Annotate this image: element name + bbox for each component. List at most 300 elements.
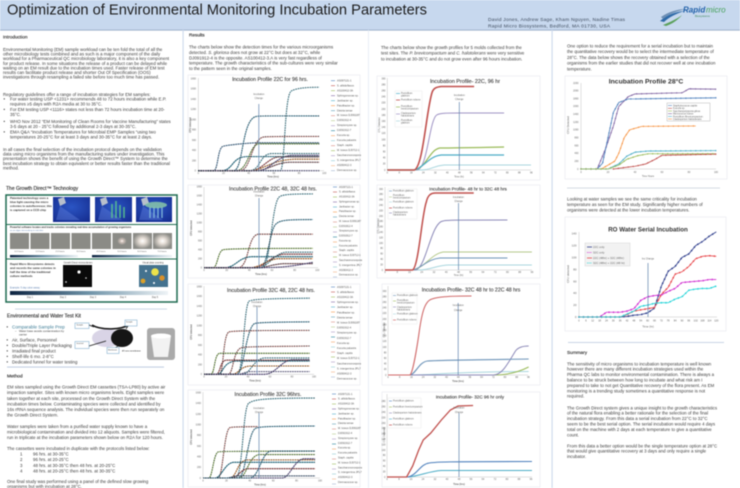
chart: incubation profile 22C 48, 32C 48: 1400 xyxy=(197,204,203,206)
chart: RO water serial incubation: 42 xyxy=(626,320,629,322)
text block: introduction body: EMA Q&A “Incubation Temperatures for Microbial EMP Samples “using two xyxy=(10,130,156,134)
chart: RO water serial incubation: 24 xyxy=(605,320,608,322)
legend xyxy=(388,398,423,428)
legend: AS100412-3A xyxy=(337,88,353,92)
text block: mold charts intro: The charts below show the growth profiles for 5 molds collected from the xyxy=(381,45,522,50)
chart: mold profile 32C 48 hr to 22C 48 hrs: 20 xyxy=(384,368,387,371)
legend: halotolerans xyxy=(397,309,411,312)
funnel cup image xyxy=(147,328,175,360)
legend xyxy=(333,186,363,277)
chart: mold profile 32C 96 hr only: 220 xyxy=(382,416,386,419)
chart: incubation profile 32C 48, 22C 48: 60 xyxy=(269,376,272,378)
chart: mold profile 22C 96 hr: 64 xyxy=(482,172,485,174)
chart: mold profile 32C 48 hr to 22C 48 hrs: 72 xyxy=(492,376,495,379)
text block: introduction body: presentation shows the benefit of using the Growth Direct™ System to determine the xyxy=(3,156,168,161)
chart: incubation profile 32C 96hrs: 600 xyxy=(197,445,202,448)
text block: method body: EM sites sampled using the Growth Direct EM cassettes (TSA-LP80) by active air xyxy=(7,385,166,390)
chart: incubation profile 22C 48, 32C 48: 0 xyxy=(203,269,205,272)
legend: S. intergerrima JPL7 xyxy=(337,158,361,162)
legend: Penicillium Brevicompactum xyxy=(673,115,703,118)
chart: mold profile 48 hr to 32C 48 hrs: 88 xyxy=(518,271,522,274)
chart: mold profile 22C 96 hr: 160 xyxy=(382,120,386,123)
day timeline: Day 3 xyxy=(90,296,97,299)
day timeline: Day 2 xyxy=(60,296,67,299)
incubation change label: Change xyxy=(253,305,262,308)
chart: incubation profile 22C 48, 32C 48: 80 xyxy=(293,269,297,272)
text block: introduction body: for product release. In some situations the release of a product can be delayed while xyxy=(3,61,168,66)
chart: mold profile 32C 48 hr to 22C 48 hrs: 40 xyxy=(445,376,448,379)
chart: incubation profile 32C 48, 22C 48: 100 xyxy=(312,376,317,378)
incubation change label: Incubation xyxy=(453,406,465,410)
heading: test kit: Environmental and Water Test Kit xyxy=(7,314,82,320)
chart: incubation profile 32C 48, 22C 48: 0 xyxy=(203,376,205,378)
chart: mold profile 32C 48 hr to 22C 48 hrs: 48 xyxy=(457,376,460,379)
chart: incubation profile 28C: Time Hours xyxy=(642,175,655,178)
chart: incubation profile 22C 96 hrs: 20 xyxy=(222,172,225,175)
chart: incubation profile 22C 96 hrs: 1200 xyxy=(191,108,197,111)
text block: mold charts intro: test sites. The P. brevicompactum and C. halotolerans were very sensitive xyxy=(381,51,524,56)
chart: mold profile 32C 96 hr only: CFU Detected xyxy=(383,427,386,443)
legend: brevicompactum xyxy=(397,302,415,305)
text block: results intro: detected. S. gloriosa does not grow at 22°C but does at 32°C, while xyxy=(189,50,320,55)
chart: mold profile 32C 48 hr to 22C 48 hrs: 80 xyxy=(384,351,387,354)
chart: mold profile 32C 96 hr only: 160 xyxy=(382,433,386,436)
chart: RO water serial incubation: 60 xyxy=(573,279,577,283)
black microcolony image xyxy=(63,262,93,287)
bullet list: carrier xyxy=(19,332,27,336)
legend: glabrum xyxy=(401,95,410,98)
text block: single temperature option: the quantitative recovery would be to select the intermediate temperature of xyxy=(567,49,714,54)
legend: 22C (48hr) + 32C (48hr) xyxy=(593,256,624,260)
text block: method body: incubation times below. Contaminating species were collected and identified by xyxy=(7,401,161,406)
panel: summary xyxy=(567,350,718,459)
chart: mold profile 22C 96 hr: 140 xyxy=(382,126,386,129)
chart: mold profile 48 hr to 32C 48 hrs: 96 xyxy=(531,271,534,274)
chart: mold profile 22C 96 hr: 200 xyxy=(382,108,386,111)
row 3 text: Rapid Micro Biosystems detects xyxy=(10,262,55,266)
row 2 time-lapse squares xyxy=(10,233,172,249)
chart: mold profile 32C 96 hr only: 8 xyxy=(398,478,400,481)
legend: Kocuria palustris xyxy=(337,346,357,350)
chart: RO water serial incubation: 0 xyxy=(578,320,580,322)
legend: DJ091912-7 xyxy=(339,235,353,238)
text block: introduction body: Environmental Monitoring (EM) sample workload can be ten fold the total of all the xyxy=(3,47,163,52)
chart: mold profile 32C 96 hr only: 56 xyxy=(470,478,473,481)
text block: introduction body: • xyxy=(4,119,6,124)
chart: incubation profile 28C: 600 xyxy=(574,144,579,147)
growth curves xyxy=(387,406,532,477)
chart: incubation profile 32C 96hrs: 80 xyxy=(295,480,299,482)
chart: incubation profile 22C 48, 32C 48: 0 xyxy=(201,266,203,270)
chart: mold profile 32C 48 hr to 22C 48 hrs: 80 xyxy=(504,376,507,379)
legend: Streptomyces sp. xyxy=(338,436,358,440)
legend: Penicillium glabrum xyxy=(393,400,414,402)
bullet list: Dedicated funnel for water testing xyxy=(12,360,78,364)
legend: S. albidoflavus xyxy=(337,83,355,87)
text block: mold charts intro: to incubation at 30-35°C and do not grow even after 96 hours incubation. xyxy=(381,56,522,61)
chart: mold profile 48 hr to 32C 48 hrs: 56 xyxy=(469,271,473,274)
chart: mold profile 48 hr to 32C 48 hrs: 120 xyxy=(379,236,384,239)
chart: RO water serial incubation: 66 xyxy=(653,320,656,322)
chart: mold profile 32C 96 hr only: 60 xyxy=(383,460,386,463)
incubation change label: Incubation xyxy=(453,304,464,307)
chart: incubation profile 28C: CFU Detected xyxy=(566,116,570,134)
text block: results intro: to the pattern seen in the original samples. xyxy=(189,66,272,71)
legend: AS100412-3A xyxy=(337,295,353,299)
text block: method body: One final study was performed using a panel of the defined slow growing xyxy=(7,479,149,484)
chart: RO water serial incubation: 120 xyxy=(572,244,577,248)
legend: Patulibacter sp. xyxy=(338,416,356,420)
row 2 time labels: 3.0 hours xyxy=(76,250,86,253)
chart: incubation profile 32C 48, 22C 48: 200 xyxy=(198,363,203,366)
legend xyxy=(585,243,630,266)
text block: water samples: Looking at water samples we see the same criticality for incubation xyxy=(567,196,697,201)
chart: RO water serial incubation: 30 xyxy=(612,320,615,322)
text block: single temperature option: One option to reduce the requirement for a serial incubation but to maintain xyxy=(567,43,714,48)
chart: mold profile 32C 48 hr to 22C 48 hrs: CFU Detected xyxy=(383,322,386,338)
row 1 text: blue light causing the micro xyxy=(10,200,49,204)
legend: Penicillium rubens xyxy=(393,424,413,426)
legend: S. albidoflavus xyxy=(338,397,356,401)
chart: incubation profile 22C 96 hrs: 80 xyxy=(298,172,301,175)
chart: mold profile 22C 96 hr: 180 xyxy=(382,114,386,117)
chart: mold profile 32C 96 hr only: 100 xyxy=(382,449,386,452)
day timeline: Day 4 xyxy=(120,296,127,299)
legend: 32C only xyxy=(593,250,605,254)
panel: introduction xyxy=(3,34,172,170)
legend: AS097121-1 xyxy=(337,78,352,82)
chart: mold profile 32C 96 hr only: 0 xyxy=(386,478,388,481)
chart: RO water serial incubation: 6 xyxy=(585,320,587,322)
legend: Cladosporium xyxy=(401,112,416,115)
chart: incubation profile 28C: 1800 xyxy=(573,97,579,100)
chart: RO water serial incubation: 72 xyxy=(660,320,663,322)
legend xyxy=(388,189,417,219)
text block: summary body: total on the machine with 2 days at each temperature to give a quantitative xyxy=(567,427,712,432)
chart: RO water serial incubation: 108 xyxy=(700,320,705,322)
text block: introduction body: • xyxy=(4,107,6,112)
text block: method body: 2 xyxy=(20,457,23,462)
chart: mold profile 32C 48 hr to 22C 48 hrs: 120 xyxy=(382,340,387,343)
legend: Sphingomonas sp. xyxy=(337,300,359,304)
legend: Penicillium xyxy=(393,194,404,197)
chart title: Incubation Profile 32C 96hrs. xyxy=(235,392,301,398)
legend: Patulibacter sp. xyxy=(339,210,357,213)
legend: Cladosporium halotolerans xyxy=(393,412,422,414)
chart: RO water serial incubation: 36 xyxy=(619,320,622,322)
text block: summary body: The Growth Direct system gives a unique insight to the growth characteristics xyxy=(567,405,718,410)
chart: incubation profile 22C 96 hrs: CFU detected xyxy=(189,117,192,133)
text block: summary body: seem to be the best serial option. The serial incubation would require 4 days xyxy=(567,422,716,426)
legend: Staphylococcus capitis xyxy=(673,104,698,107)
legend: Dermacoccus sp. xyxy=(339,274,359,277)
chart: mold profile 22C 96 hr: 40 xyxy=(383,157,386,160)
chart: incubation profile 32C 48, 22C 48: CFU detected xyxy=(190,324,193,340)
chart: incubation profile 28C: 20 xyxy=(607,171,610,174)
text block: summary body: balance to be struck between how long to incubate and what risk am I xyxy=(567,378,702,382)
legend: Janibacter sp. xyxy=(337,98,353,102)
row 2 time labels: 0.0 hours xyxy=(14,250,24,253)
chart: mold profile 48 hr to 32C 48 hrs: 300 xyxy=(379,188,384,191)
legend: AS090412-3 xyxy=(338,475,353,479)
chart: mold profile 22C 96 hr: 80 xyxy=(383,144,386,147)
legend: M. luteus DJ0712-1 xyxy=(339,254,361,257)
legend: DJ091912-4 xyxy=(337,118,352,122)
row 2 time labels: 6.0 hours xyxy=(137,250,147,253)
legend: Kocuria sp. xyxy=(673,107,685,110)
chart: mold profile 32C 48 hr to 22C 48 hrs: 180 xyxy=(382,323,387,326)
chart: mold profile 48 hr to 32C 48 hrs: 180 xyxy=(379,220,384,223)
chart: mold profile 32C 48 hr to 22C 48 hrs: 300 xyxy=(382,290,387,293)
chart: RO water serial incubation: 102 xyxy=(694,320,698,322)
chart: RO water serial incubation: 54 xyxy=(639,320,643,322)
technology diagram frame: as an algae microcolony in real-time xyxy=(10,229,44,232)
incubation change label: Change xyxy=(454,200,463,203)
chart: mold profile 32C 96 hr only: 260 xyxy=(382,406,386,409)
title: Optimization of Environmental Monitoring Incubation Parameters xyxy=(7,3,427,19)
chart: mold profile 32C 48 hr to 22C 48 hrs: 240 xyxy=(382,307,387,310)
cassette image with callouts: Inverted xyxy=(76,342,83,345)
chart: incubation profile 22C 96 hrs: 600 xyxy=(192,139,197,142)
column dividers xyxy=(182,30,553,488)
chart: mold profile 22C 96 hr: 32 xyxy=(434,172,437,174)
legend: Saccharomonospora xyxy=(338,465,362,469)
legend: S. intergerrima JPL7 xyxy=(338,470,362,474)
legend: Janibacter sp. xyxy=(338,411,354,415)
incubation change label: Incubation xyxy=(453,196,465,199)
chart title: RO Water Serial Incubation xyxy=(608,226,688,234)
legend: Staph. capitis xyxy=(337,143,353,147)
text block: introduction body: For water testing USP <1231> recommends 48 to 72 hours incubation while E.P. xyxy=(10,97,166,102)
chart: mold profile 48 hr to 32C 48 hrs: 240 xyxy=(379,204,384,207)
chart: incubation profile 32C 96hrs: 800 xyxy=(197,434,202,437)
legend: Dietzia terrae xyxy=(337,108,353,112)
chart: mold profile 48 hr to 32C 48 hrs: 220 xyxy=(379,209,384,212)
legend: Janibacter sp. xyxy=(339,205,355,208)
row 2 text: Powerful software locates and tracks colonies revealing real-time accumulation of growing organisms xyxy=(10,226,132,229)
authors: Rapid Micro Biosystems, Bedford, MA 01730, USA xyxy=(488,24,611,30)
legend: 22C only xyxy=(593,245,605,249)
text block: summary body: From this data a better option would be the single temperature option at 28°C xyxy=(567,443,717,448)
legend: Saccharomonospora xyxy=(337,361,361,365)
legend: Saccharomonospora xyxy=(337,153,361,157)
growth curves xyxy=(385,193,532,270)
legend: Kocuria palustris xyxy=(338,451,358,455)
text block: introduction body: waiting on an EM result due to the incubation times used. Faster release of EM test xyxy=(3,65,165,70)
incubation change label: Change xyxy=(255,97,264,100)
chart: RO water serial incubation: 120 xyxy=(714,320,719,322)
legend xyxy=(331,78,361,172)
chart: RO water serial incubation: 78 xyxy=(667,320,670,322)
chart: incubation profile 22C 48, 32C 48: 1600 xyxy=(197,194,203,198)
text block: water samples: organisms were detected at the lower incubation temperatures. xyxy=(567,207,690,212)
legend: Penicillium glabrum xyxy=(393,418,414,420)
chart: RO water serial incubation: 90 xyxy=(681,320,684,322)
chart: mold profile 22C 96 hr: 80 xyxy=(506,172,509,174)
bullet list: Double/Triple Layer Packaging xyxy=(12,343,72,348)
chart: mold profile 32C 96 hr only: 20 xyxy=(383,470,386,473)
legend: glabrum xyxy=(401,122,410,125)
day timeline: Day 5 xyxy=(152,296,159,299)
text block: introduction body: Regulatory guidelines offer a range of incubation strategies for EM samples: xyxy=(3,92,151,97)
heading: summary: Summary xyxy=(567,350,588,355)
logo: micro xyxy=(706,6,726,14)
chart: mold profile 22C 96 hr: 48 xyxy=(458,172,461,174)
text block: method body: Water samples were taken from a purified water supply known to have a xyxy=(7,424,148,429)
legend: Kocuria palustris xyxy=(337,138,357,142)
chart: mold profile 22C 96 hr: 72 xyxy=(494,172,497,174)
chart: mold profile 48 hr to 32C 48 hrs: 280 xyxy=(379,193,384,196)
chart: mold profile 32C 96 hr only: 40 xyxy=(383,465,386,468)
chart: mold profile 22C 96 hr xyxy=(377,76,540,180)
text block: summary body: however there are many different incubation strategies used within the xyxy=(567,367,704,372)
chart: incubation profile 32C 48, 22C 48: 1200 xyxy=(197,315,203,318)
cassette image with callouts: Sample xyxy=(126,322,132,324)
bullet list: Comparable Sample Prep xyxy=(12,324,65,330)
chart title: Incubation Profile- 48 hr to 32C 48 hrs xyxy=(429,186,508,192)
chart: mold profile 22C 96 hr: 88 xyxy=(518,172,521,174)
chart: RO water serial incubation xyxy=(565,217,726,331)
text block: method body: microbiological contamination and divided into 12 aliquots. Samples were filtered, xyxy=(7,430,165,435)
technology diagram frame: Example: 5 day colon assay xyxy=(10,286,41,290)
chart: mold profile 32C 48 hr to 22C 48 hrs: 200 xyxy=(382,318,387,321)
cassette image with callouts: Sample xyxy=(76,324,83,326)
chart: incubation profile 28C: 60 xyxy=(661,171,664,174)
chart: mold profile 32C 48 hr to 22C 48 hrs xyxy=(382,284,540,385)
chart: mold profile 22C 96 hr: 24 xyxy=(422,172,425,174)
cassette image with callouts: 47-mm membrane xyxy=(122,350,142,352)
chart: incubation profile 22C 48, 32C 48: 200 xyxy=(198,258,203,260)
row 2 time labels: 4.0 hours xyxy=(96,250,106,253)
text block: summary body: that would give quantitative recovery at 3 days and only require a single xyxy=(567,449,707,454)
chart: mold profile 32C 48 hr to 22C 48 hrs: 16 xyxy=(410,376,413,379)
chart: incubation profile 22C 48, 32C 48: Time (hrs) xyxy=(255,273,267,276)
chart: incubation profile 32C 96hrs: Time (hrs) xyxy=(254,484,266,486)
chart: incubation profile 32C 96hrs: 400 xyxy=(197,455,202,458)
chart title: Incubation Profile- 22C, 96 hr xyxy=(430,79,500,85)
legend: Dietzia terrae xyxy=(338,421,354,425)
heading: growth direct: The Growth Direct™ Technology xyxy=(6,186,79,192)
legend: DJ091912-4 xyxy=(339,225,353,228)
chart: incubation profile 28C: 1200 xyxy=(573,121,579,124)
legend: Cladosporium halotolerans xyxy=(673,118,702,121)
chart: mold profile 32C 96 hr only: 72 xyxy=(494,478,497,481)
legend: S. albidoflavus xyxy=(339,191,356,194)
chart: incubation profile 28C: 800 xyxy=(574,137,579,140)
chart: mold profile 32C 48 hr to 22C 48 hrs: 280 xyxy=(382,295,387,298)
legend: Kocuria sp. xyxy=(338,446,351,450)
text block: introduction body: workload for a Pharmaceutical QC microbiology laboratory, it is also a key component xyxy=(3,56,170,61)
cassette image with callouts: Membrane xyxy=(108,348,117,352)
header banner xyxy=(0,0,740,31)
chart: incubation profile 32C 48, 22C 48: 40 xyxy=(247,376,250,378)
chart: incubation profile 32C 96hrs: 40 xyxy=(248,480,252,482)
legend: Patulibacter sp. xyxy=(337,310,355,314)
text block: summary body: The sensitivity of micro organisms to incubation temperature is well known xyxy=(567,361,712,366)
chart: incubation profile 32C 48, 22C 48 xyxy=(188,284,361,385)
panel: environmental and water test kit xyxy=(6,314,175,364)
heading: results: Results xyxy=(189,32,205,38)
chart: incubation profile 22C 48, 32C 48: 600 xyxy=(198,240,203,242)
incubation change label: Incubation xyxy=(251,301,263,304)
chart: mold profile 48 hr to 32C 48 hrs: Time (hr) xyxy=(454,274,464,277)
chart: incubation profile 22C 96 hrs: 100 xyxy=(322,172,327,175)
legend: halotolerans xyxy=(393,214,407,217)
legend: M. luteus DJ0712-1 xyxy=(337,356,360,360)
text block: method body: 96 hrs. at 30-35°C xyxy=(33,452,69,457)
chart: mold profile 32C 48 hr to 22C 48 hrs: 160 xyxy=(382,329,387,332)
legend: DJ091912-7 xyxy=(338,441,353,445)
growth curves xyxy=(387,86,531,170)
chart: mold profile 48 hr to 32C 48 hrs: 80 xyxy=(380,247,384,250)
chart: mold profile 32C 96 hr only: 40 xyxy=(446,478,449,481)
chart: RO water serial incubation: 96 xyxy=(687,320,691,322)
chart: incubation profile 22C 48, 32C 48: 800 xyxy=(198,230,203,234)
chart: mold profile 48 hr to 32C 48 hrs: 100 xyxy=(379,242,384,245)
chart title: Incubation Profile 32C 48, 22C 48 hrs. xyxy=(227,288,315,294)
legend: Penicillium rubens xyxy=(401,98,421,102)
chart: incubation profile 32C 96hrs: 200 xyxy=(197,466,202,469)
chart: incubation profile 28C: 0 xyxy=(580,171,582,174)
text block: summary body: Pharma QC labs to monitor environmental contamination. There is always a xyxy=(567,372,715,377)
legend: Penicillium brevicompactum xyxy=(393,406,423,408)
chart: mold profile 32C 48 hr to 22C 48 hrs: 0 xyxy=(385,374,387,377)
chart: mold profile 32C 96 hr only: 80 xyxy=(383,454,386,457)
text block: method body: the Growth Direct System. xyxy=(7,413,58,418)
incubation change label: Change xyxy=(455,98,464,101)
bullet list: Shelf-life 6 mo. 2-8°C xyxy=(12,354,54,359)
chart: incubation profile 32C 48, 22C 48: 400 xyxy=(198,354,203,357)
bullet list: • xyxy=(6,324,8,330)
chart: mold profile 48 hr to 32C 48 hrs: 20 xyxy=(380,263,384,266)
chart: mold profile 48 hr to 32C 48 hrs: 64 xyxy=(482,271,485,274)
incubation change label: Incubation xyxy=(253,190,265,194)
logo: Rapid xyxy=(683,6,706,14)
chart: incubation profile 28C: 80 xyxy=(688,171,691,174)
legend xyxy=(667,103,710,121)
chart: mold profile 32C 48 hr to 22C 48 hrs: 88 xyxy=(515,376,519,379)
text block: method body: 16s rRNA sequence analysis. The individual species were then run separately on xyxy=(7,407,165,412)
chart title: Incubation Profile 22C for 96 hrs. xyxy=(232,77,308,83)
chart: mold profile 32C 96 hr only: 240 xyxy=(382,411,386,414)
text block: introduction body: data using micro organisms from the manufacturing suites under investigation. This xyxy=(3,152,165,157)
text block: summary body: incubation strategy. From this data a serial incubation from 22°C to 32°C xyxy=(567,416,708,421)
chart: mold profile 32C 48 hr to 22C 48 hrs: 220 xyxy=(382,312,387,315)
legend: Penicillium glabrum xyxy=(393,200,414,204)
chart: incubation profile 32C 96hrs: 0 xyxy=(200,477,202,480)
chart: mold profile 22C 96 hr: Time (hr) xyxy=(454,176,464,178)
chart: incubation profile 32C 48, 22C 48: 600 xyxy=(198,344,203,347)
chart: mold profile 22C 96 hr: 260 xyxy=(382,90,386,93)
chart: RO water serial incubation: 18 xyxy=(598,320,602,322)
chart: mold profile 32C 96 hr only: 200 xyxy=(382,422,386,425)
chart: RO water serial incubation: 40 xyxy=(573,291,577,295)
chart: mold profile 48 hr to 32C 48 hrs: 40 xyxy=(445,271,448,274)
chart title: Incubation Profile- 32C 96 hr only xyxy=(436,394,505,400)
chart: incubation profile 32C 96hrs: CFU detected xyxy=(190,429,193,445)
legend: DJ091912-4 xyxy=(338,431,353,435)
chart title: Incubation Profile 22C 48, 32C 48 hrs. xyxy=(229,186,317,192)
chart: incubation profile 28C: 2000 xyxy=(573,90,579,93)
chart: mold profile 48 hr to 32C 48 hrs: 0 xyxy=(382,269,384,272)
row 2 time labels: 1.0 hours xyxy=(35,250,45,253)
text block: method body: 48 hrs. at 20-25°C then 48 hrs. at 30-35°C xyxy=(33,468,115,473)
chart: mold profile 32C 96 hr only: 96 xyxy=(530,478,533,481)
legend: Sphingomonas sp. xyxy=(339,200,360,203)
legend: M. luteus DJ091187 xyxy=(339,220,362,223)
legend: Streptomyces sp. xyxy=(337,123,357,127)
chart: incubation profile 22C 48, 32C 48: 20 xyxy=(225,269,229,272)
